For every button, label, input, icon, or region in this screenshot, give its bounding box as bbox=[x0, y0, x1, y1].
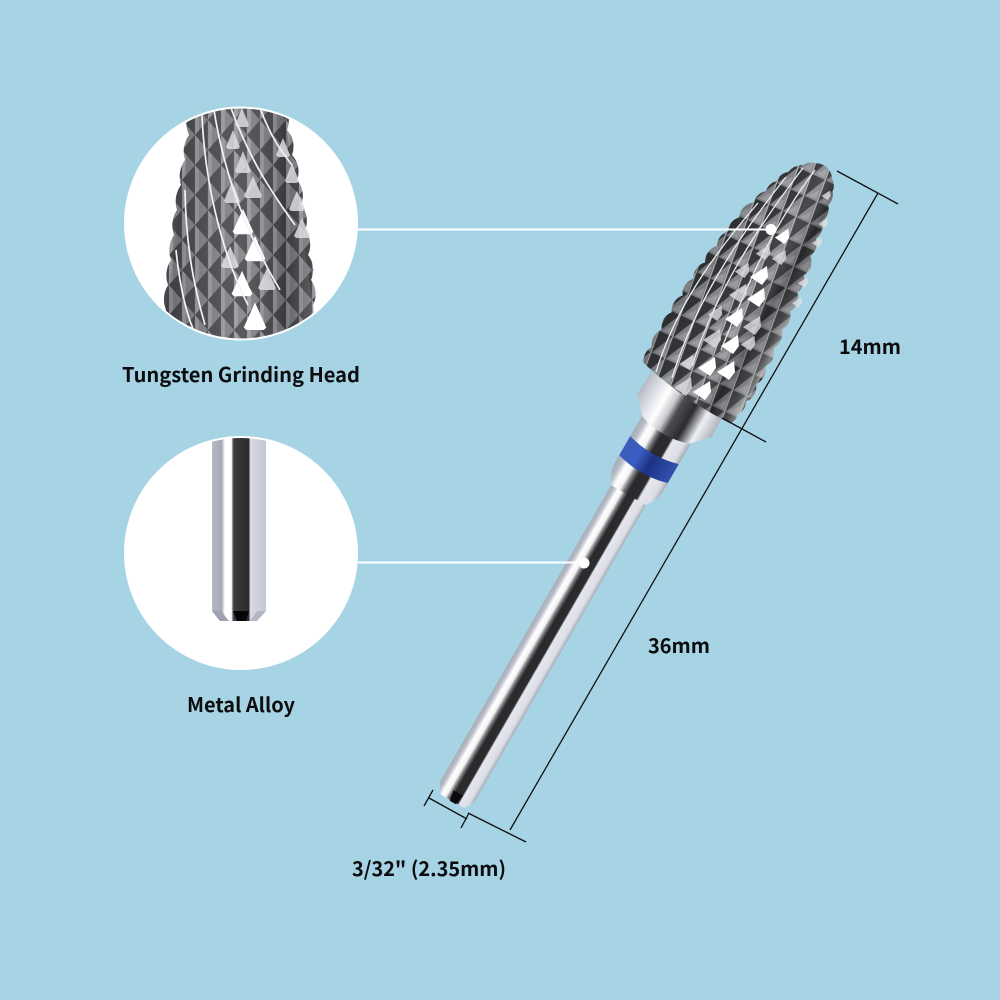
neck bbox=[604, 412, 693, 509]
label: tungsten grinding head: Tungsten Grinding Head bbox=[122, 359, 360, 388]
label: 36mm: 36mm bbox=[648, 630, 710, 659]
label: shank diameter: 3/32" (2.35mm) bbox=[352, 853, 506, 882]
callout line: shank bbox=[358, 558, 590, 568]
shank bbox=[435, 480, 649, 811]
label: metal alloy: Metal Alloy bbox=[187, 689, 296, 718]
label: 14mm: 14mm bbox=[839, 331, 901, 360]
magnified shank bbox=[212, 438, 266, 621]
knurled tungsten head bbox=[643, 162, 834, 424]
dimension line: head width and length bbox=[468, 171, 898, 842]
magnified knurled head bbox=[164, 105, 316, 345]
panel: tungsten grinding head magnified circle bbox=[124, 105, 358, 345]
shank tip bbox=[448, 790, 463, 805]
blue ring bbox=[617, 436, 679, 487]
bur shank and neck bbox=[414, 371, 725, 823]
callout line: head bbox=[358, 224, 776, 235]
collar bbox=[627, 371, 725, 456]
dimension line: shank diameter bbox=[424, 790, 469, 828]
panel: metal alloy magnified circle bbox=[124, 436, 358, 670]
infographic canvas bbox=[122, 106, 900, 880]
